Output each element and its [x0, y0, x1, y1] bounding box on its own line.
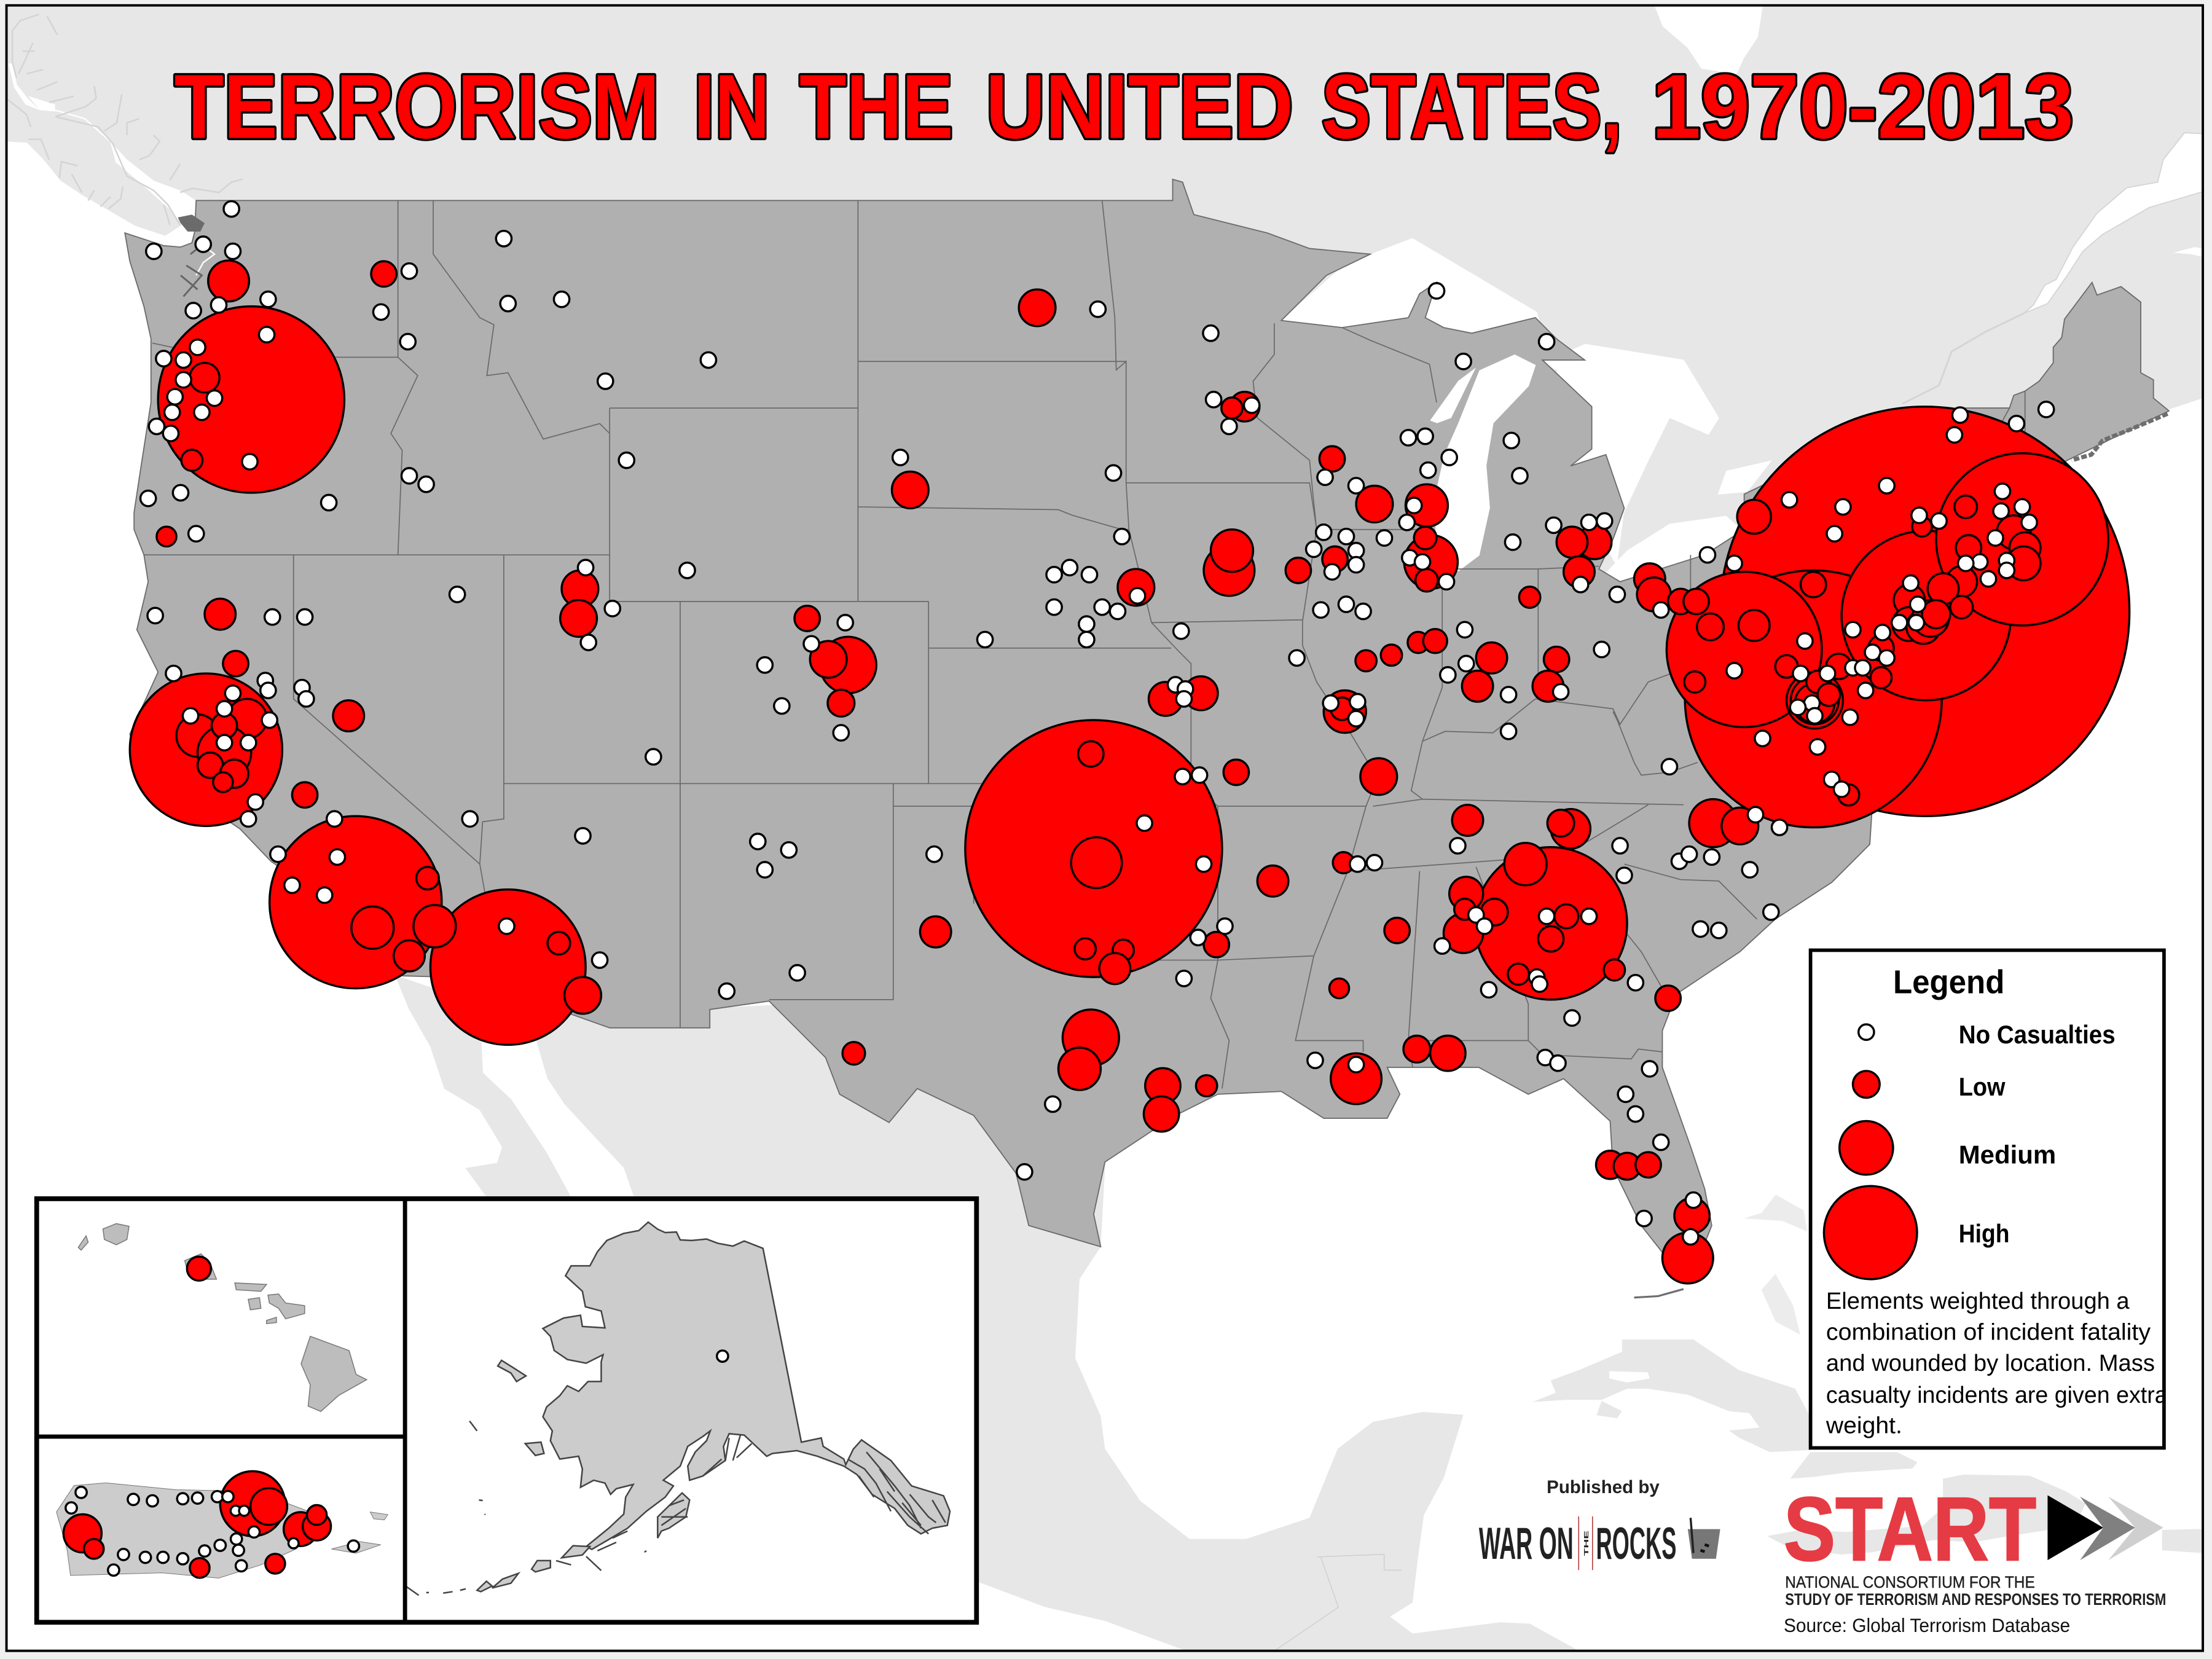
- Hawaii incident: [187, 1257, 211, 1281]
- Puget Sound detail: [178, 214, 214, 297]
- legend item: high: [1824, 1186, 2009, 1279]
- legend note: combination of incident fatality: [1826, 1320, 2151, 1346]
- panel: Hawaii, Puerto Rico and Alaska insets: [37, 1199, 976, 1622]
- legend note: and wounded by location. Mass: [1826, 1351, 2155, 1376]
- Mexico mainland: [536, 989, 1586, 1655]
- publisher credit: ROCKS: [1596, 1518, 1676, 1569]
- legend item: low: Low: [1959, 1073, 2006, 1101]
- Lake Michigan and Green Bay: [1430, 355, 1535, 571]
- Hudson and James Bay water: [1654, 6, 1763, 74]
- legend heading: Legend: [1893, 964, 2004, 1001]
- Caribbean islands: [1533, 1339, 2208, 1555]
- START arrows: [2047, 1495, 2163, 1560]
- Great Lakes water: [1279, 238, 1772, 582]
- British Columbia fjords: [6, 14, 243, 226]
- War on the Rocks wordmark: THE: [1583, 1531, 1590, 1556]
- consortium name: NATIONAL CONSORTIUM FOR THE: [1785, 1573, 2035, 1591]
- title: IN: [694, 56, 770, 158]
- St Lawrence gulf water: [2023, 133, 2211, 313]
- legend item: no casualties: No Casualties: [1959, 1021, 2116, 1049]
- START wordmark: START: [1784, 1479, 2036, 1580]
- legend item: no casualties: [1859, 1021, 2116, 1049]
- title: [175, 56, 2074, 158]
- title: TERRORISM: [175, 56, 660, 158]
- panel: legend: [1811, 950, 2168, 1448]
- incident circles: medium and low casualty: [157, 261, 2041, 1284]
- incident circles: high casualty bubbles: [130, 307, 2130, 1045]
- published by label: Published by: [1547, 1477, 1660, 1497]
- inset: Alaska: [406, 1222, 950, 1595]
- Central American borders: [1275, 1555, 1402, 1650]
- title: UNITED: [986, 56, 1293, 158]
- Prince Edward Island water: [2174, 247, 2202, 257]
- Canada landmass: [0, 0, 2211, 593]
- Baja California: [395, 975, 571, 1197]
- legend item: medium: [1840, 1121, 2056, 1175]
- title: 1970-2013: [1652, 56, 2074, 158]
- legend item: low: [1853, 1071, 2006, 1101]
- icon: rocks glass: [1688, 1518, 1720, 1559]
- inset: Hawaii islands: [78, 1223, 367, 1411]
- St Lawrence river line: [1902, 313, 2023, 404]
- Bahamas: [1744, 1194, 1807, 1335]
- legend note: weight.: [1826, 1413, 1902, 1438]
- Maine coast islands: [2071, 414, 2168, 460]
- legend note: Elements weighted through a: [1826, 1288, 2130, 1314]
- War on the Rocks wordmark: WAR ON: [1479, 1518, 1574, 1569]
- START logo and source: [1784, 1479, 2166, 1636]
- Strait of Georgia and coastal water: [9, 64, 195, 221]
- title: STATES,: [1322, 56, 1622, 158]
- publisher credit: [1479, 1477, 1720, 1570]
- source line: Source: Global Terrorism Database: [1784, 1615, 2070, 1636]
- incident circles: no casualties: [141, 201, 2054, 1245]
- state boundaries: [144, 200, 2025, 1089]
- inset dividers: [37, 1199, 405, 1622]
- lower 48 states land: [125, 179, 2169, 1279]
- legend item: high: High: [1959, 1220, 2009, 1248]
- legend note: casualty incidents are given extra: [1826, 1382, 2168, 1408]
- Florida Keys: [1634, 1289, 1684, 1298]
- inset: Puerto Rico: [57, 1471, 388, 1578]
- title: THE: [799, 56, 953, 158]
- legend note: [1826, 1288, 2168, 1438]
- legend item: medium: Medium: [1959, 1140, 2056, 1169]
